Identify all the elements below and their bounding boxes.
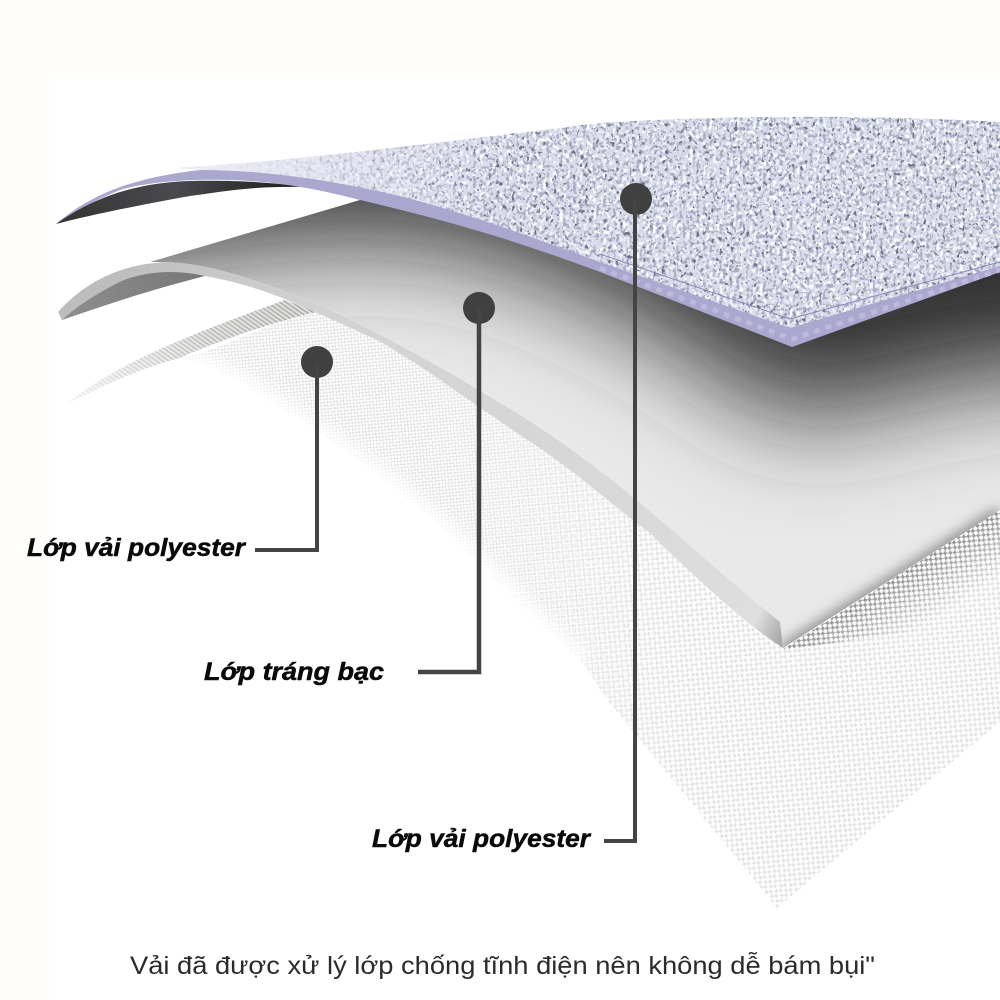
label: Lớp vải polyester [372, 825, 591, 853]
label: Lớp tráng bạc [204, 658, 384, 686]
callout: bottom polyester layer [27, 346, 333, 562]
leader line [418, 308, 479, 672]
fabric woven surface [180, 117, 1000, 330]
caption: Vải đã được xử lý lớp chống tĩnh điện nên không dễ bám bụi" [130, 951, 875, 980]
marker dot [620, 183, 652, 215]
layer: top polyester fabric [56, 117, 1000, 347]
mesh back strip [68, 300, 318, 403]
leader line [604, 199, 635, 841]
marker dot [301, 346, 333, 378]
coating surface [150, 200, 1000, 648]
coating underside [62, 265, 205, 320]
callout: silver coating layer [204, 292, 495, 686]
coating front edge [58, 262, 783, 648]
label: Lớp vải polyester [27, 534, 246, 562]
fabric dark underside [56, 181, 300, 224]
layer: bottom polyester mesh [68, 300, 1000, 908]
leader line [255, 362, 317, 550]
layer: silver coating [58, 200, 1000, 648]
mesh surface [180, 312, 1000, 908]
fabric purple edge band [56, 170, 1000, 347]
callout: top polyester layer [372, 183, 652, 853]
marker dot [463, 292, 495, 324]
